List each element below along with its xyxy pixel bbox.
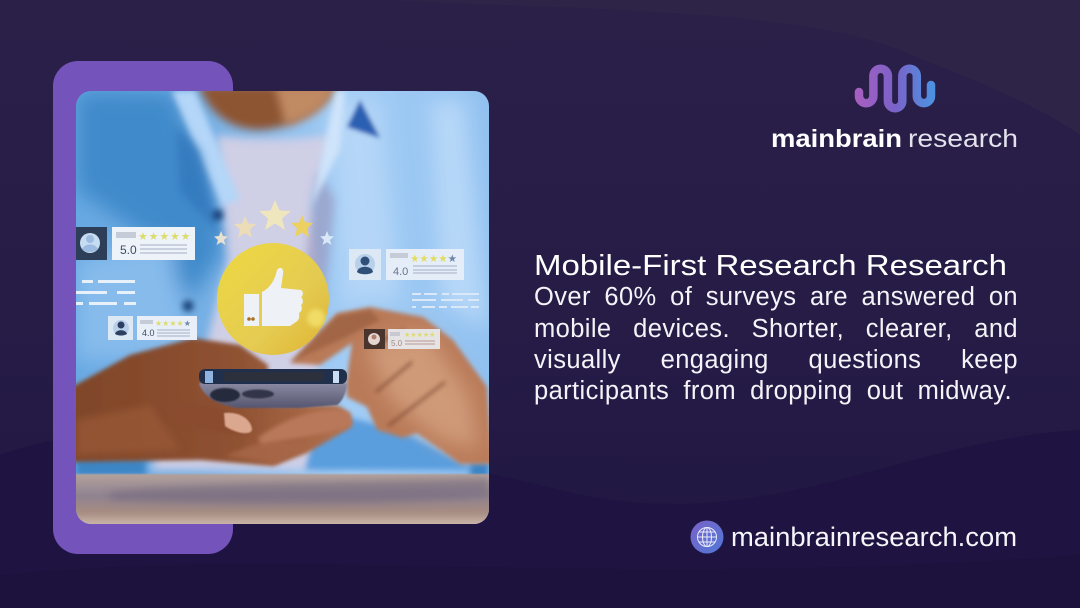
card: 4.0 rating right: [349, 249, 464, 280]
icon: wave logo mark: [859, 69, 931, 108]
card: 5.0 rating top left: 5.0: [120, 243, 137, 257]
card: 4.0 rating lower left: 4.0: [142, 328, 155, 338]
icon: globe: [690, 520, 724, 554]
card: 4.0 rating right: ★★★★★: [410, 253, 457, 265]
card: 5.0 rating top left: [76, 227, 195, 260]
body text: mobile devices. Shorter, clearer, and: [534, 315, 1018, 343]
icon: thumbs up on yellow circle: [217, 243, 329, 355]
decorative text lines right: [412, 293, 479, 308]
table: [70, 474, 495, 529]
phone: [199, 369, 347, 408]
logo wordmark: research: research: [908, 125, 1018, 153]
card: 5.0 rating on right hand: [364, 329, 440, 349]
heading: Mobile-First Research Research: [534, 250, 1007, 282]
card: 5.0 rating top left: ★★★★★: [138, 230, 191, 243]
card: 5.0 rating on right hand: 5.0: [391, 339, 403, 348]
body text: visually engaging questions keep: [534, 346, 1018, 374]
t-shirt: [150, 135, 333, 470]
card: 4.0 rating lower left: [108, 316, 197, 340]
shirt and body background: [66, 81, 499, 534]
photo: hands holding phone: [66, 81, 499, 534]
neck: [198, 85, 335, 130]
body text: participants from dropping out midway.: [534, 377, 1012, 405]
card: 4.0 rating right: 4.0: [393, 266, 408, 278]
decorative text lines left: [76, 280, 136, 305]
body text: Over 60% of surveys are answered on: [534, 283, 1018, 311]
website url: mainbrainresearch.com: [731, 522, 1017, 552]
collar: [172, 91, 240, 205]
panel: purple backing rectangle: [53, 61, 233, 554]
card: 4.0 rating lower left: ★★★★★: [155, 319, 191, 328]
icon: stars: [214, 200, 334, 245]
lower shirt: [305, 410, 475, 470]
card: 5.0 rating on right hand: ★★★★★: [404, 331, 435, 339]
left hand: [70, 338, 352, 466]
logo wordmark: mainbrain: [771, 125, 902, 153]
logo: mainbrain research: [771, 69, 931, 153]
right hand: [290, 307, 492, 464]
